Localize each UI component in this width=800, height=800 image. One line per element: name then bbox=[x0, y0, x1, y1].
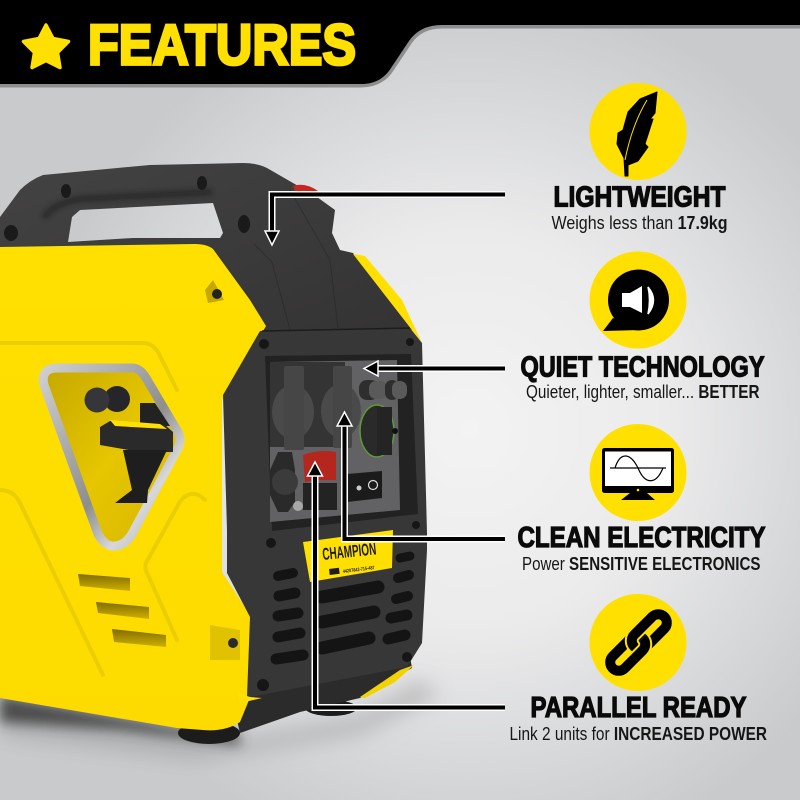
ground shadow bbox=[0, 680, 440, 760]
heading: lightweight: LIGHTWEIGHT bbox=[554, 181, 726, 213]
front panel bbox=[223, 328, 427, 697]
icon: speaker bubble bbox=[590, 252, 686, 348]
caption: clean electricity: Power SENSITIVE ELECTRONICS bbox=[522, 554, 760, 574]
control plate bbox=[270, 360, 400, 522]
arrow: parallel ready bbox=[308, 462, 505, 708]
feet bbox=[178, 700, 357, 744]
contact shadow bbox=[0, 695, 240, 745]
fuel dial bbox=[360, 405, 398, 457]
feature: quiet technology bbox=[520, 252, 765, 402]
icon: feather bbox=[590, 83, 686, 180]
indicator label bbox=[347, 471, 382, 502]
vent slots bbox=[276, 556, 410, 659]
champion label: 44207842-715-487 bbox=[343, 565, 375, 575]
base bbox=[230, 640, 412, 733]
12v outlet bbox=[270, 452, 303, 512]
title: FEATURES bbox=[88, 14, 356, 77]
icon: monitor sine wave bbox=[590, 424, 686, 521]
recoil knob bbox=[84, 386, 130, 412]
housing seam bbox=[254, 190, 338, 330]
yellow corner tab bbox=[238, 693, 262, 703]
icon: star bbox=[24, 25, 68, 68]
heading: quiet technology: QUIET TECHNOLOGY bbox=[520, 351, 765, 383]
heading: parallel ready: PARALLEL READY bbox=[530, 691, 747, 723]
socket 1 bbox=[272, 366, 314, 450]
handle underside shading bbox=[44, 192, 212, 218]
caption: lightweight: Weighs less than 17.9kg bbox=[552, 213, 728, 233]
feature: parallel ready bbox=[510, 594, 767, 744]
feature: lightweight bbox=[552, 83, 728, 233]
dark socket surround bbox=[270, 362, 345, 447]
control recess bbox=[265, 354, 418, 531]
arrow: lightweight bbox=[265, 194, 505, 245]
champion label bbox=[303, 530, 393, 582]
header banner bbox=[0, 0, 800, 84]
heading: clean electricity: CLEAN ELECTRICITY bbox=[518, 521, 766, 553]
arrow: clean electricity bbox=[337, 412, 505, 539]
body emboss lines bbox=[0, 343, 205, 675]
lower screw recess bbox=[210, 625, 240, 660]
red breaker cover bbox=[303, 451, 336, 482]
screw recess bbox=[205, 280, 224, 303]
knobs bbox=[359, 380, 407, 400]
yellow body bbox=[0, 244, 266, 730]
handle screws bbox=[4, 176, 250, 241]
panel screws bbox=[257, 338, 420, 691]
red button bbox=[293, 185, 318, 192]
handle and upper housing bbox=[0, 163, 412, 335]
right yellow sliver bbox=[353, 254, 422, 343]
dark block bbox=[140, 403, 170, 426]
generator bbox=[0, 163, 427, 744]
icon: chain link bbox=[590, 594, 686, 691]
champion label: CHAMPION bbox=[321, 539, 377, 564]
yellow base sliver bbox=[360, 665, 414, 698]
pull start window bbox=[43, 368, 180, 546]
black breaker bbox=[303, 483, 337, 510]
side vents bbox=[78, 574, 166, 647]
caption: quiet technology: Quieter, lighter, smaller... BETTER bbox=[526, 382, 760, 402]
caption: parallel ready: Link 2 units for INCREASED POWER bbox=[510, 724, 767, 744]
socket 2 bbox=[321, 366, 361, 448]
arrow: quiet technology bbox=[364, 361, 505, 376]
feature: clean electricity bbox=[518, 424, 766, 574]
pull handle bbox=[100, 421, 173, 452]
panel upper seam bbox=[262, 328, 410, 331]
